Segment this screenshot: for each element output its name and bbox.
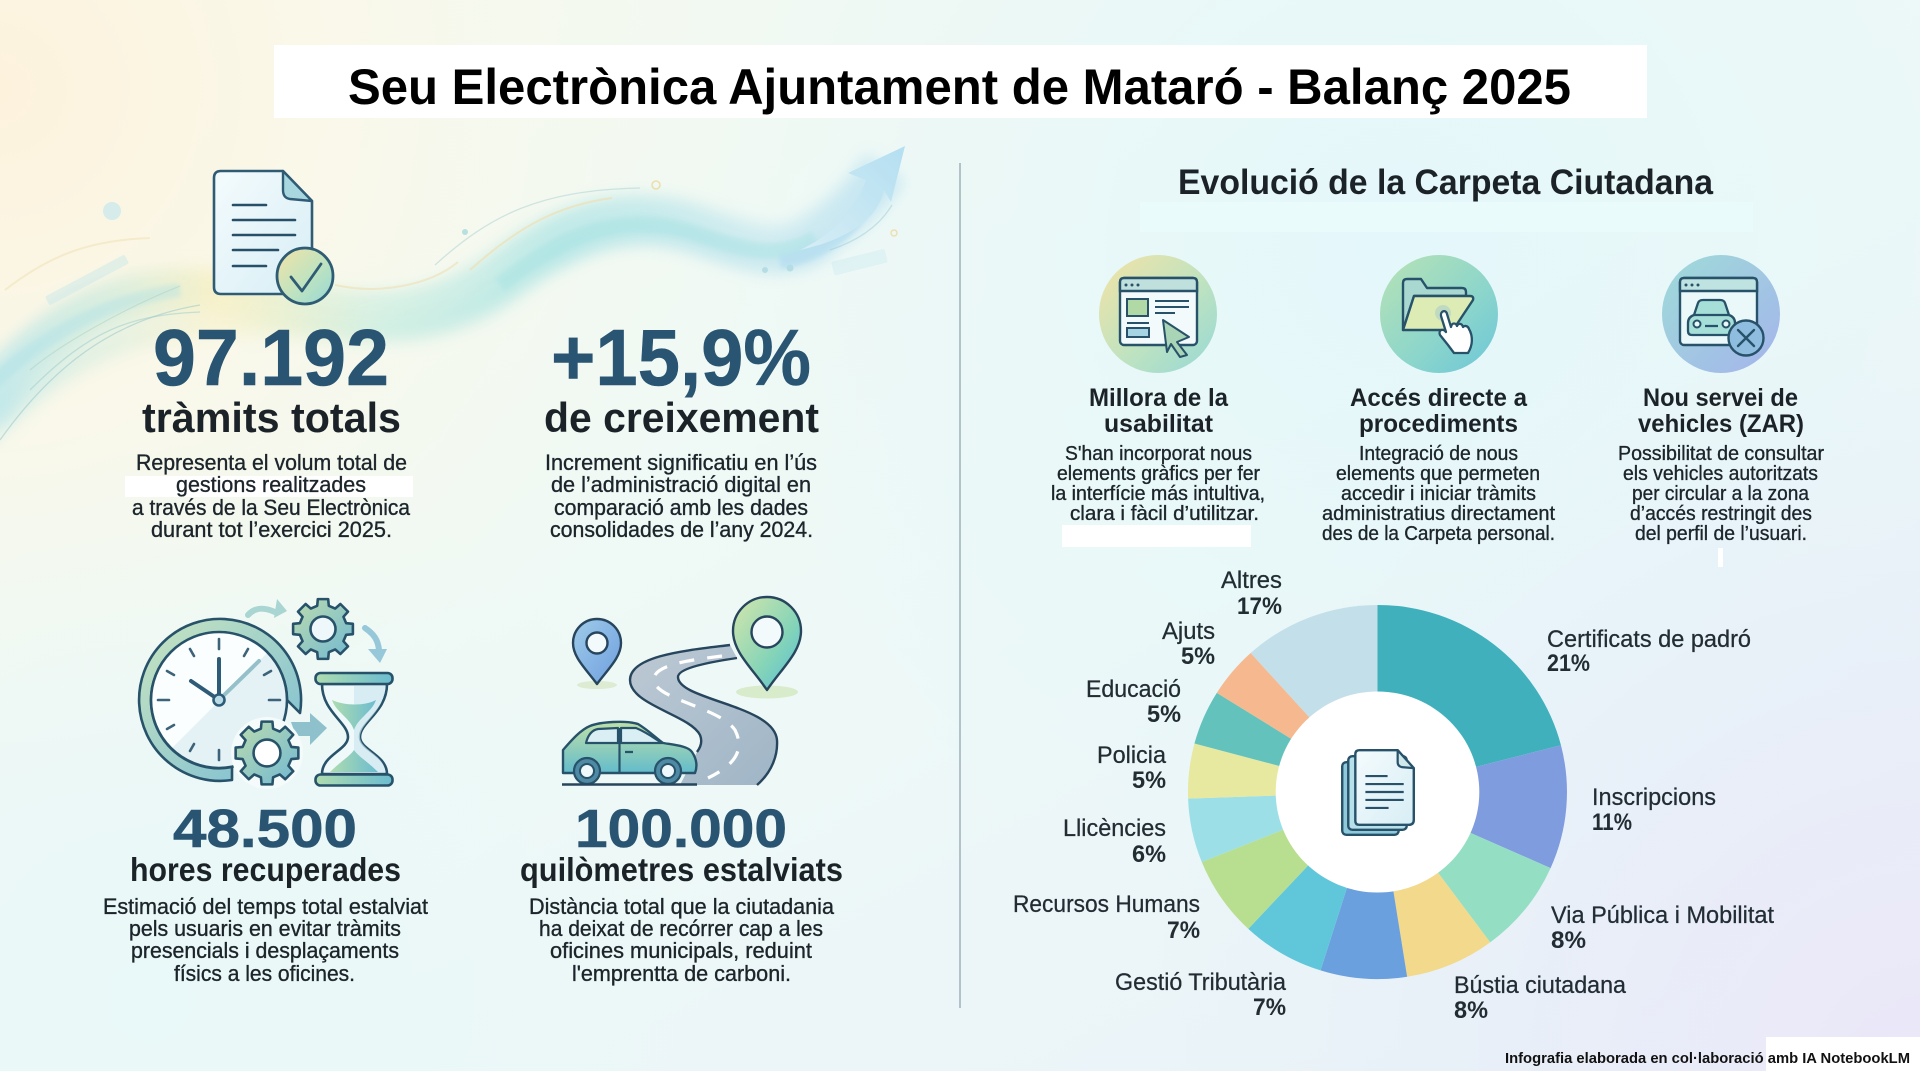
label: Policia: Policia: [1097, 742, 1167, 769]
stat: 100.000 quilòmetres estalviats: l'emprentta de carboni.: [572, 961, 791, 986]
label: Altres: Altres: [1221, 567, 1282, 594]
label: Recursos Humans: Recursos Humans: [1013, 891, 1200, 918]
slice: Certificats de padró 21%: [1378, 605, 1561, 792]
slice: Altres 17%: [1251, 605, 1378, 792]
label: Ajuts: [1162, 618, 1215, 670]
label: Educació: Educació: [1086, 676, 1181, 703]
feature: Accés directe a procediments: Integració de nous: [1359, 442, 1518, 465]
feature: Millora de la usabilitat: [1051, 255, 1265, 547]
slice: Recursos Humans 7%: [1248, 792, 1378, 970]
stat: 100.000 quilòmetres estalviats: [520, 799, 843, 986]
label: Ajuts: 5%: [1181, 643, 1215, 670]
stat: 48.500 hores recuperades: Estimació del temps total estalviat: [103, 894, 428, 919]
stat: 100.000 quilòmetres estalviats: quilòmetres estalviats: [520, 851, 843, 888]
label: Gestió Tributària: [1115, 969, 1287, 1021]
label: Recursos Humans: 7%: [1167, 917, 1200, 944]
stat: 48.500 hores recuperades: físics a les oficines.: [174, 961, 355, 986]
label: Inscripcions: [1592, 784, 1716, 836]
stat: 48.500 hores recuperades: pels usuaris en evitar tràmits: [129, 916, 401, 941]
feature: Millora de la usabilitat: elements gràfics per fer: [1057, 462, 1260, 485]
label: Llicències: Llicències: [1063, 815, 1166, 842]
slice: Educació 5%: [1188, 744, 1378, 799]
feature: Accés directe a procediments: des de la Carpeta personal.: [1322, 522, 1555, 545]
stat: +15,9% de creixement: +15,9%: [551, 313, 811, 402]
slice: Ajuts 5%: [1194, 693, 1378, 792]
stat: 97.192 tràmits totals: a través de la Seu Electrònica: [132, 495, 411, 520]
decorative growth wave with arrow: [0, 146, 905, 440]
feature: Nou servei de vehicles (ZAR): [1618, 255, 1824, 567]
chart labels: [1013, 567, 1774, 1024]
stat: 97.192 tràmits totals: tràmits totals: [142, 394, 401, 441]
label: Ajuts: Ajuts: [1162, 618, 1215, 645]
stat: 97.192 tràmits totals: 97.192: [153, 313, 389, 402]
feature: Nou servei de vehicles (ZAR): Possibilitat de consultar: [1618, 442, 1824, 465]
label: Bústia ciutadana: [1454, 972, 1627, 1024]
stat: 100.000 quilòmetres estalviats: 100.000: [575, 799, 787, 859]
feature: Millora de la usabilitat: S'han incorporat nous: [1065, 442, 1252, 465]
slice: Bústia ciutadana 8%: [1378, 792, 1490, 977]
footer credit: Infografia elaborada en col·laboració amb IA NotebookLM: [1505, 1050, 1910, 1067]
stat: +15,9% de creixement: [544, 313, 819, 542]
feature: Millora de la usabilitat: Millora de la: [1089, 384, 1229, 412]
stat: +15,9% de creixement: de l’administració digital en: [551, 472, 811, 497]
donut chart: [1188, 605, 1567, 979]
stat: +15,9% de creixement: comparació amb les dades: [554, 495, 808, 520]
label: Certificats de padró: [1547, 626, 1751, 677]
stat: 48.500 hores recuperades: [103, 799, 428, 986]
feature: Nou servei de vehicles (ZAR): d’accés restringit des: [1630, 502, 1812, 525]
slice: Inscripcions 11%: [1378, 745, 1567, 868]
icon: document with check: [214, 171, 333, 304]
stat: 97.192 tràmits totals: durant tot l’exercici 2025.: [151, 517, 392, 542]
stat: +15,9% de creixement: Increment significatiu en l’ús: [545, 450, 817, 475]
label: Bústia ciutadana: 8%: [1454, 997, 1488, 1024]
icon: road, car and map pins: [562, 597, 801, 785]
slice: Altres orange: [1217, 653, 1378, 792]
stat: 100.000 quilòmetres estalviats: oficines municipals, reduint: [550, 938, 812, 963]
label: Educació: 5%: [1147, 701, 1181, 728]
stat: 48.500 hores recuperades: hores recuperades: [130, 851, 401, 888]
feature: Nou servei de vehicles (ZAR): per circular a la zona: [1632, 482, 1810, 505]
slice: Via Pública i Mobilitat 8%: [1378, 792, 1551, 942]
label: Via Pública i Mobilitat: Via Pública i Mobilitat: [1551, 902, 1774, 929]
label: Certificats de padró: Certificats de padró: [1547, 626, 1751, 653]
title banner: [274, 45, 1647, 118]
label: Via Pública i Mobilitat: 8%: [1551, 927, 1586, 954]
stat: +15,9% de creixement: consolidades de l’any 2024.: [550, 517, 813, 542]
label: Via Pública i Mobilitat: [1551, 902, 1774, 954]
footer credit: [1505, 1037, 1920, 1071]
stat: +15,9% de creixement: de creixement: [544, 394, 819, 441]
feature: Accés directe a procediments: [1322, 255, 1555, 545]
feature: Accés directe a procediments: accedir i iniciar tràmits: [1341, 482, 1536, 505]
icon: stacked documents: [1342, 750, 1414, 835]
label: Certificats de padró: 21%: [1547, 650, 1590, 677]
label: Llicències: [1063, 815, 1166, 868]
donut hole: [1276, 692, 1479, 892]
slice: Policia 5%: [1188, 792, 1378, 862]
label: Recursos Humans: [1013, 891, 1200, 944]
stat: 48.500 hores recuperades: 48.500: [173, 799, 357, 859]
feature: Millora de la usabilitat: la interfície más intultiva,: [1051, 482, 1265, 505]
title banner: Seu Electrònica Ajuntament de Mataró - Balanç 2025: [348, 59, 1571, 115]
label: Policia: [1097, 742, 1167, 794]
label: Altres: [1221, 567, 1282, 620]
label: Gestió Tributària: Gestió Tributària: [1115, 969, 1287, 996]
heading: Evolució de la Carpeta Ciutadana: [1140, 163, 1753, 232]
stat: 97.192 tràmits totals: [125, 313, 413, 542]
label: Inscripcions: 11%: [1592, 809, 1632, 836]
label: Inscripcions: Inscripcions: [1592, 784, 1716, 811]
slice: Llicències 6%: [1202, 792, 1378, 929]
feature: Millora de la usabilitat: clara i fàcil d’utilitzar.: [1070, 502, 1259, 525]
icon: clock, gears and hourglass: [139, 599, 392, 790]
feature: Nou servei de vehicles (ZAR): els vehicles autoritzats: [1623, 462, 1818, 485]
stat: 48.500 hores recuperades: presencials i desplaçaments: [131, 938, 399, 963]
label: Policia: 5%: [1132, 767, 1166, 794]
label: Gestió Tributària: 7%: [1253, 994, 1286, 1021]
feature: Accés directe a procediments: administratius directament: [1322, 502, 1555, 525]
stat: 97.192 tràmits totals: Representa el volum total de: [136, 450, 407, 475]
feature: Accés directe a procediments: elements que permeten: [1336, 462, 1540, 485]
stat: 100.000 quilòmetres estalviats: ha deixat de recórrer cap a les: [539, 916, 823, 941]
section divider: [959, 163, 961, 1008]
label: Bústia ciutadana: Bústia ciutadana: [1454, 972, 1627, 999]
slice: Gestió Tributària 7%: [1321, 792, 1407, 979]
feature: Nou servei de vehicles (ZAR): vehicles (ZAR): [1638, 410, 1804, 438]
heading: Evolució de la Carpeta Ciutadana: Evolució de la Carpeta Ciutadana: [1178, 163, 1714, 202]
stat: 97.192 tràmits totals: gestions realitzades: [176, 472, 366, 497]
stat: 100.000 quilòmetres estalviats: Distància total que la ciutadania: [529, 894, 835, 919]
feature: Nou servei de vehicles (ZAR): del perfil de l’usuari.: [1635, 522, 1807, 545]
feature: Nou servei de vehicles (ZAR): Nou servei de: [1643, 384, 1798, 412]
label: Educació: [1086, 676, 1181, 728]
feature: Millora de la usabilitat: usabilitat: [1104, 410, 1214, 438]
label: Altres: 17%: [1237, 593, 1282, 620]
label: Llicències: 6%: [1132, 841, 1166, 868]
feature: Accés directe a procediments: procediments: [1359, 410, 1518, 438]
feature: Accés directe a procediments: Accés directe a: [1350, 384, 1528, 412]
